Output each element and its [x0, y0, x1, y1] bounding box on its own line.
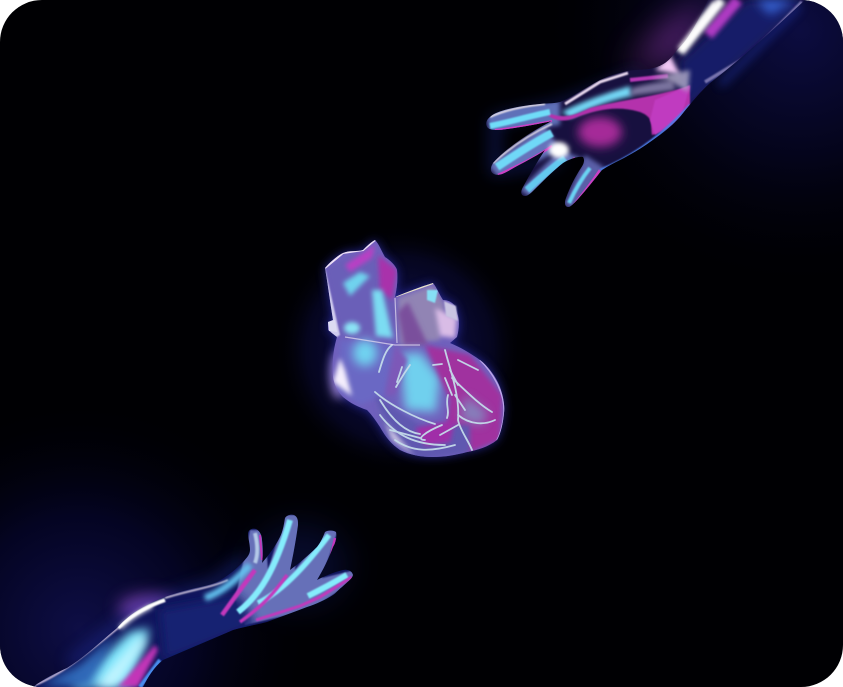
chamber seams: [345, 298, 420, 345]
aorta stub: [328, 320, 337, 332]
coronary vessels: [375, 345, 495, 450]
bright highlight over upper wrist: [680, 3, 716, 50]
pulmonary stub: [444, 301, 458, 321]
heart colour fields: [322, 245, 502, 460]
upper hand body: [486, 0, 805, 207]
hand: upper right, reaching down: [482, 0, 805, 207]
bright highlight on lower forearm: [120, 606, 152, 628]
glow around upper hand: [495, 0, 800, 170]
heart: iridescent anatomical heart: [320, 235, 510, 460]
heart rim light: [325, 240, 504, 440]
hand: lower left, reaching up: [20, 510, 360, 687]
lower hand body: [20, 510, 360, 687]
heart body: [320, 235, 510, 460]
glow around lower hand: [70, 523, 348, 665]
heart outer glow: [325, 240, 504, 457]
